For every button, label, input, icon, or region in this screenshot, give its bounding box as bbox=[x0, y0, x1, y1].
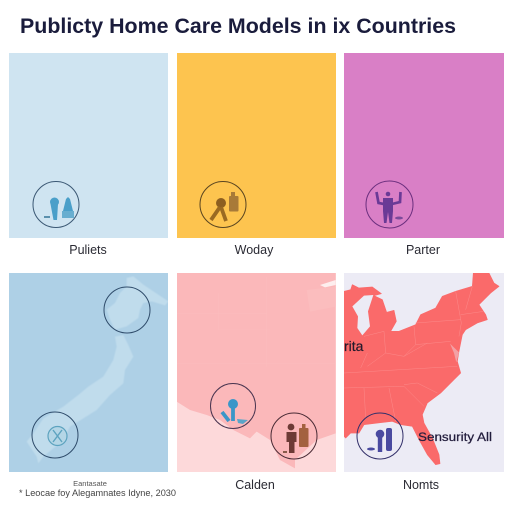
panel: calden map bbox=[177, 270, 336, 472]
label: nomts: Nomts bbox=[403, 478, 439, 492]
icon: puliets circle bbox=[33, 182, 79, 228]
map: japan islands bbox=[27, 276, 168, 463]
icon: parter circle bbox=[366, 181, 413, 228]
map: land bbox=[177, 270, 336, 468]
panel: parter bbox=[344, 53, 504, 238]
icon: blue figure circle bbox=[210, 384, 256, 428]
map label: rita: rita bbox=[344, 338, 364, 354]
icon: navy figure circle bbox=[357, 413, 403, 459]
panel: eastern us map bbox=[344, 273, 504, 472]
label: woday: Woday bbox=[235, 243, 274, 257]
icon: south circle bbox=[32, 412, 78, 458]
footnote: * Leocae foy Alegamnates Idyne, 2030 bbox=[19, 488, 176, 498]
icon: north circle bbox=[104, 287, 150, 333]
label: earthquake: Eantasate bbox=[73, 479, 107, 488]
panel: japan map bbox=[9, 273, 168, 472]
title: Publicty Home Care Models in ix Countries bbox=[20, 14, 456, 38]
map label: sensurity all: Sensurity All bbox=[418, 430, 492, 444]
label: parter: Parter bbox=[406, 243, 440, 257]
panel: woday bbox=[177, 53, 336, 238]
icon: woday circle bbox=[200, 182, 246, 228]
icon: brown figure circle bbox=[271, 413, 317, 459]
panel: puliets bbox=[9, 53, 168, 238]
label: pulets: Puliets bbox=[69, 243, 107, 257]
label: calden: Calden bbox=[235, 478, 275, 492]
map: eastern states bbox=[344, 273, 499, 465]
